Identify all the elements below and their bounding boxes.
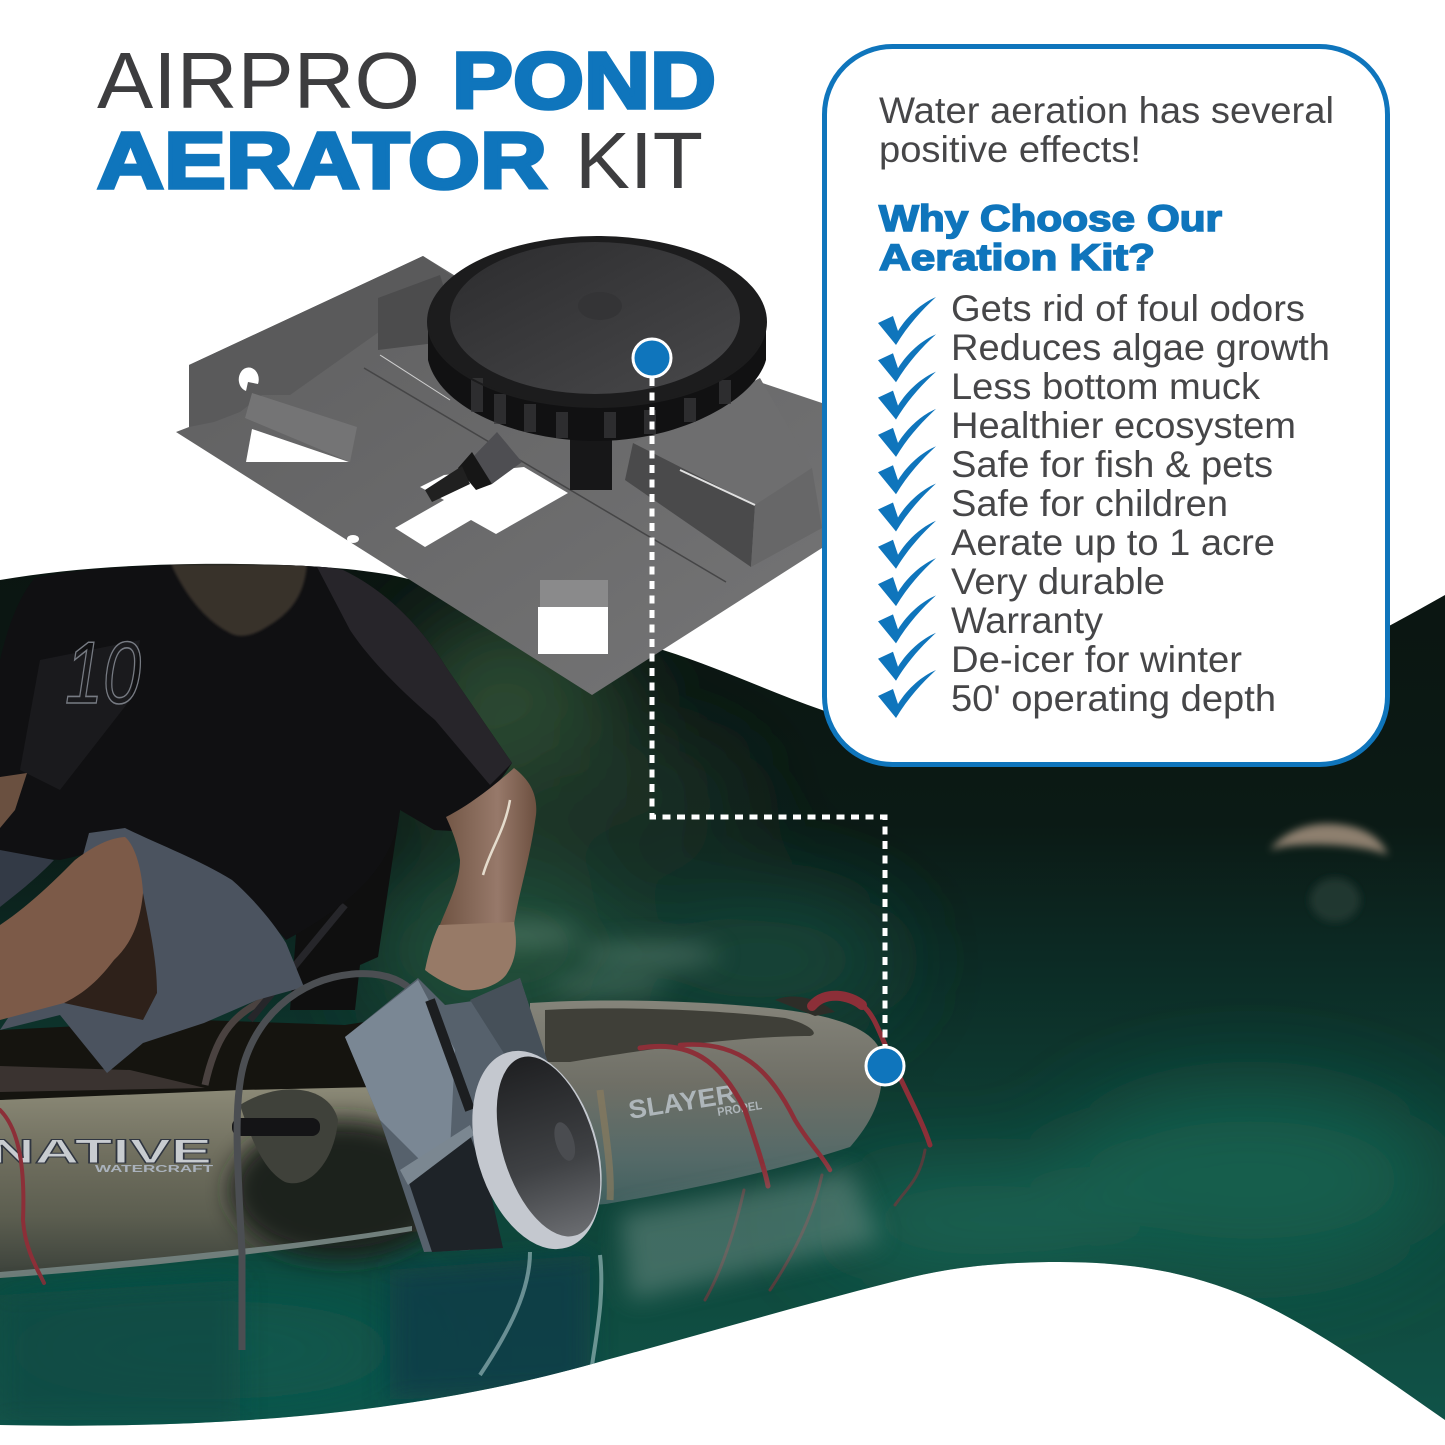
kayak brand text SLAYER: PROPEL bbox=[716, 1098, 763, 1119]
aerator diffuser disc bbox=[472, 1050, 602, 1250]
cutout: centre slot bbox=[395, 467, 568, 547]
cutout: small hole bbox=[347, 535, 359, 543]
aerator mount plate bbox=[345, 978, 548, 1252]
benefits list: Healthier ecosystem bbox=[951, 405, 1296, 446]
benefits list bbox=[951, 288, 1330, 719]
metal base plate bbox=[176, 256, 822, 695]
cutout: round notch bbox=[239, 367, 259, 391]
air hose bbox=[237, 974, 420, 1350]
man right arm bbox=[439, 768, 536, 927]
kayak brand text NATIVE: WATERCRAFT bbox=[95, 1164, 213, 1175]
benefits list: Aerate up to 1 acre bbox=[951, 522, 1275, 563]
cutout: tab triangle bbox=[245, 393, 357, 462]
panel: benefits bbox=[824, 46, 1388, 764]
hose barb fitting bbox=[425, 432, 522, 502]
intro text: Water aeration has several bbox=[879, 90, 1334, 131]
raised channel right bbox=[364, 355, 822, 582]
distant log bbox=[1270, 824, 1388, 922]
kayak handle recess bbox=[232, 1089, 338, 1183]
aerator reflection in water bbox=[480, 1252, 601, 1380]
title: AERATOR bbox=[97, 116, 547, 205]
man shirt bbox=[0, 565, 512, 940]
marker dot: on product bbox=[633, 339, 671, 377]
man thigh bbox=[0, 837, 157, 1020]
man shirt sleeve and number: 10 bbox=[65, 623, 141, 722]
kayak brand text SLAYER bbox=[630, 1086, 762, 1118]
left wall bbox=[189, 256, 455, 427]
checkmarks bbox=[878, 297, 936, 718]
benefits list: Safe for fish & pets bbox=[951, 444, 1273, 485]
intro text: positive effects! bbox=[879, 129, 1141, 170]
kayak hull bow bbox=[530, 996, 882, 1210]
benefits list: Gets rid of foul odors bbox=[951, 288, 1305, 329]
benefits list: Less bottom muck bbox=[951, 366, 1261, 407]
water reflections bbox=[0, 1170, 880, 1420]
kayak brand text NATIVE bbox=[0, 1139, 213, 1172]
marker dot: on photo bbox=[866, 1047, 904, 1085]
front tab box bbox=[538, 580, 608, 654]
photo: man lowering aerator from kayak bbox=[0, 560, 1445, 1440]
panel heading: Aeration Kit? bbox=[879, 237, 1155, 278]
benefits list: Safe for children bbox=[951, 483, 1228, 524]
panel heading bbox=[879, 198, 1222, 278]
title: AIRPRO bbox=[97, 36, 420, 125]
benefits list: De-icer for winter bbox=[951, 639, 1242, 680]
kayak deck and seat bbox=[0, 824, 398, 1100]
forest and water colour zones bbox=[0, 610, 1440, 1400]
man shorts bbox=[0, 828, 304, 1073]
dotted connector line bbox=[652, 378, 885, 1048]
benefits list: Reduces algae growth bbox=[951, 327, 1330, 368]
panel heading: Why Choose Our bbox=[879, 198, 1222, 239]
product image: aerator on metal base bbox=[176, 237, 822, 695]
water glints near kayak bbox=[460, 923, 720, 994]
man beard bbox=[171, 564, 307, 636]
diffuser stem bbox=[570, 430, 612, 490]
man hand bbox=[425, 922, 516, 990]
raised channel left bbox=[378, 275, 460, 350]
benefits list: 50' operating depth bbox=[951, 678, 1276, 719]
man shirt sleeve and number bbox=[20, 565, 512, 790]
rope on bow bbox=[0, 996, 930, 1300]
title: KIT bbox=[575, 116, 703, 205]
diffuser disc bbox=[428, 237, 766, 441]
kayak hull stern bbox=[0, 1087, 423, 1278]
title: POND bbox=[452, 36, 716, 125]
man left arm bbox=[0, 773, 27, 828]
intro text bbox=[879, 90, 1334, 170]
benefits list: Warranty bbox=[951, 600, 1103, 641]
kayak brand text SLAYER: SLAYER bbox=[626, 1078, 738, 1125]
benefits list: Very durable bbox=[951, 561, 1165, 602]
title bbox=[97, 36, 716, 205]
